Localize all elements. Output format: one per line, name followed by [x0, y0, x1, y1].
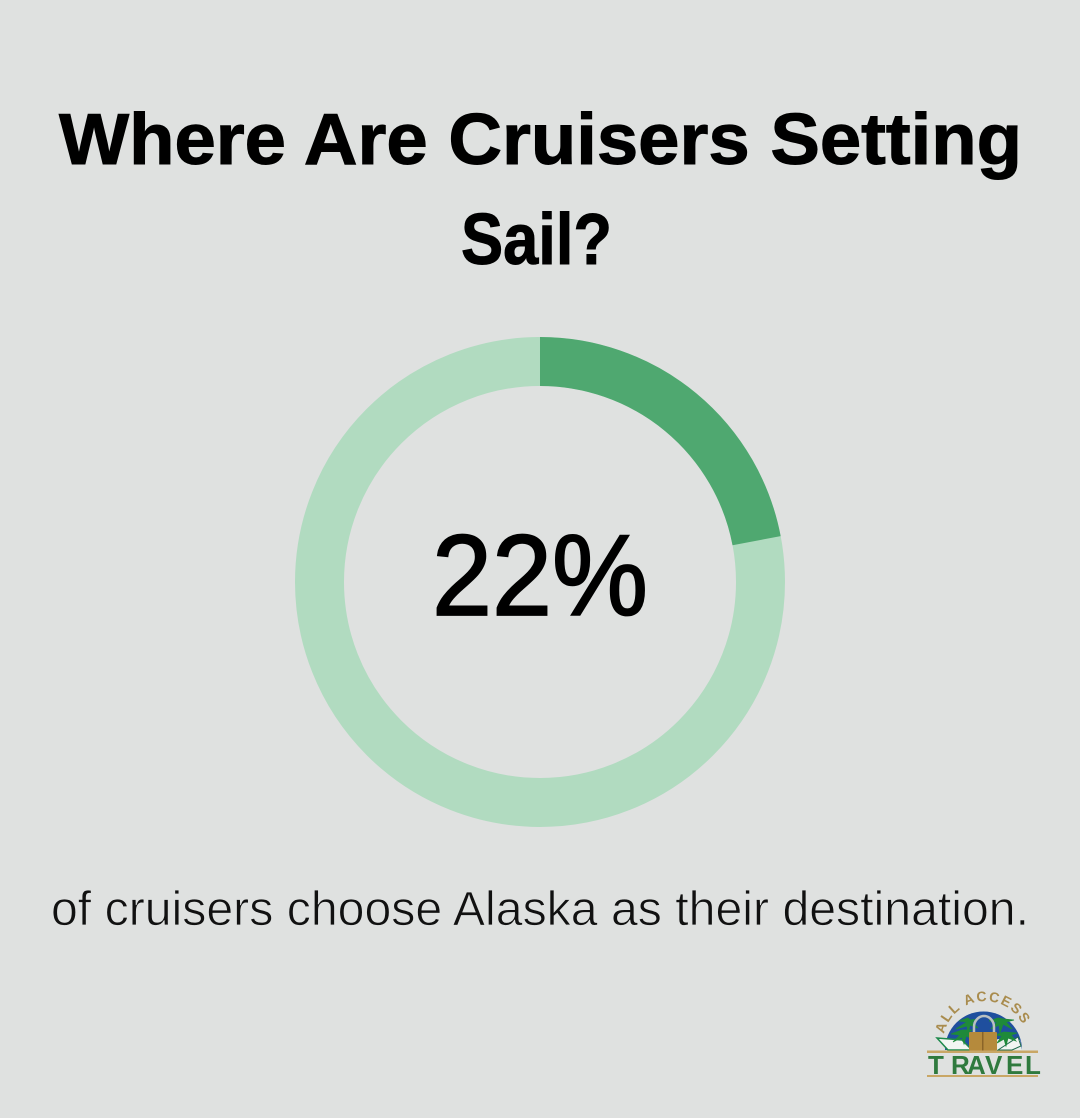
logo: All Access Travel [927, 992, 1041, 1080]
logo bottom bar [927, 1075, 1038, 1077]
logo wordmark: TRAVEL [928, 1050, 1041, 1080]
logo palm trees [951, 1018, 1017, 1046]
logo top bar [927, 1050, 1038, 1053]
percentage value: 22% [432, 512, 648, 640]
logo boats [937, 1038, 972, 1050]
logo arched text [944, 1001, 1026, 1034]
logo: All Access Travel: ALL ACCESS [936, 992, 1030, 1034]
title [59, 100, 1022, 280]
title: Where Are Cruisers Setting [59, 100, 1022, 180]
caption: of cruisers choose Alaska as their destination. [51, 883, 1029, 936]
title: Sail? [461, 200, 612, 280]
logo globe dome [945, 1012, 1022, 1050]
logo padlock [974, 1016, 994, 1032]
donut chart [320, 362, 760, 802]
